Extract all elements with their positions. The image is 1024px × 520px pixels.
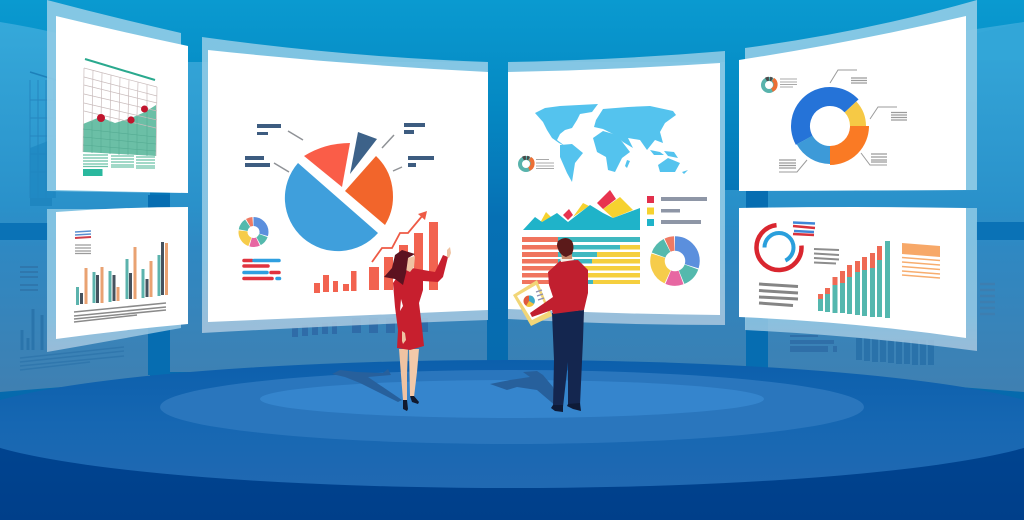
floor stage (0, 360, 1024, 520)
bar chart (78, 242, 166, 305)
panel: grouped bars, lower left (47, 207, 188, 352)
area line chart (83, 59, 157, 156)
panel: world map (508, 51, 725, 325)
legend stripes (793, 222, 815, 235)
legs (399, 349, 419, 400)
small donut (239, 218, 268, 246)
panel: main pie chart (202, 37, 488, 333)
horizontal legend bars (244, 260, 280, 278)
growth bars (314, 222, 438, 293)
arm gap (400, 299, 403, 311)
button (83, 169, 102, 176)
exploded pie chart (285, 132, 393, 251)
neck and head (557, 238, 574, 259)
small donut with label (763, 79, 797, 91)
red sweater with arm (530, 260, 588, 317)
shoes (551, 403, 581, 412)
legend (647, 196, 707, 226)
caption lines (74, 303, 166, 322)
pie labels and leader lines (245, 123, 434, 172)
donut chart (652, 238, 698, 284)
collar (560, 256, 574, 262)
person: man with clipboard (513, 238, 588, 412)
shoes (403, 396, 419, 411)
orange table (902, 243, 940, 278)
donut leader lines and labels (779, 70, 907, 172)
clipboard (513, 280, 552, 326)
hair (384, 250, 415, 285)
panel: rising columns, lower right (739, 207, 977, 351)
hand and face (402, 247, 451, 344)
panel: donut chart, top right (739, 0, 977, 191)
small donut with label (520, 158, 554, 170)
stacked horizontal bars (522, 237, 640, 284)
red dress (393, 255, 448, 350)
text block lower (759, 284, 798, 306)
legend stripes (75, 231, 91, 254)
person: woman presenting (384, 247, 451, 411)
text block (814, 249, 839, 264)
large donut chart (790, 86, 870, 166)
progress rings (755, 223, 803, 272)
arrow: rising trend (372, 211, 427, 262)
floor shadows of the two people (332, 369, 557, 407)
table under line chart (83, 155, 155, 168)
world map (535, 104, 688, 182)
stacked columns (818, 241, 890, 318)
wall reflections of charts (20, 72, 995, 370)
panel: line chart, top left (47, 0, 188, 193)
navy trousers (552, 310, 584, 407)
mountain area chart (523, 190, 640, 230)
